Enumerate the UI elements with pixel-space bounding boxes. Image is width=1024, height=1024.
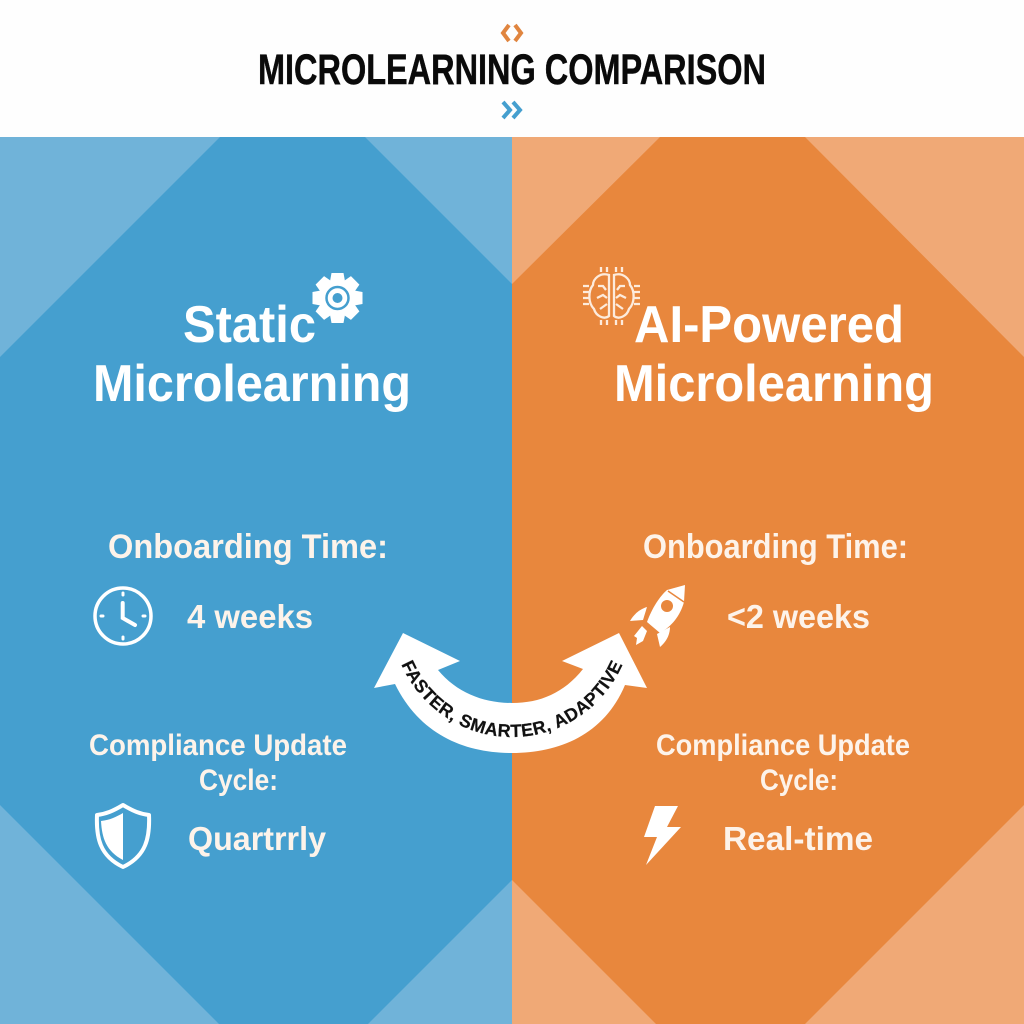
heading: ai-powered microlearning: Microlearning bbox=[614, 355, 934, 413]
label: onboarding time: Onboarding Time: bbox=[643, 528, 908, 566]
header icon: orange code brackets bbox=[503, 25, 521, 41]
icon: brain chip bbox=[583, 267, 640, 325]
heading: static microlearning bbox=[93, 296, 411, 413]
icon: lightning bolt bbox=[644, 806, 681, 865]
label: compliance update cycle bbox=[89, 729, 347, 797]
header band bbox=[0, 0, 1024, 137]
label: compliance update cycle bbox=[656, 729, 910, 797]
icon: shield bbox=[97, 805, 149, 867]
panel: static microlearning bbox=[0, 137, 512, 1024]
value: 4 weeks: 4 weeks bbox=[187, 598, 313, 635]
header icon: blue chevrons bbox=[503, 102, 520, 118]
heading: ai-powered microlearning: AI-Powered bbox=[634, 296, 904, 354]
label: compliance update cycle: Cycle: bbox=[760, 764, 838, 797]
label: compliance update cycle: Cycle: bbox=[199, 764, 278, 797]
icon: rocket bbox=[630, 585, 685, 647]
icon: clock bbox=[95, 588, 151, 644]
value: under 2 weeks: <2 weeks bbox=[727, 598, 870, 635]
arrow text: FASTER, SMARTER, ADAPTIVE bbox=[402, 660, 622, 738]
label: compliance update cycle: Compliance Update bbox=[656, 729, 910, 762]
panel: ai-powered microlearning bbox=[512, 137, 1024, 1024]
heading: static microlearning: Microlearning bbox=[93, 355, 411, 413]
value: quarterly: Quartrrly bbox=[188, 820, 327, 857]
value: real-time: Real-time bbox=[723, 820, 873, 857]
icon: gear bbox=[312, 273, 362, 323]
label: onboarding time: Onboarding Time: bbox=[108, 528, 388, 566]
heading: ai-powered microlearning bbox=[614, 296, 934, 413]
label: compliance update cycle: Compliance Update bbox=[89, 729, 347, 762]
heading: static microlearning: Static bbox=[183, 296, 316, 354]
arrow: faster, smarter, adaptive bbox=[374, 633, 647, 753]
title: MICROLEARNING COMPARISON bbox=[258, 46, 766, 94]
